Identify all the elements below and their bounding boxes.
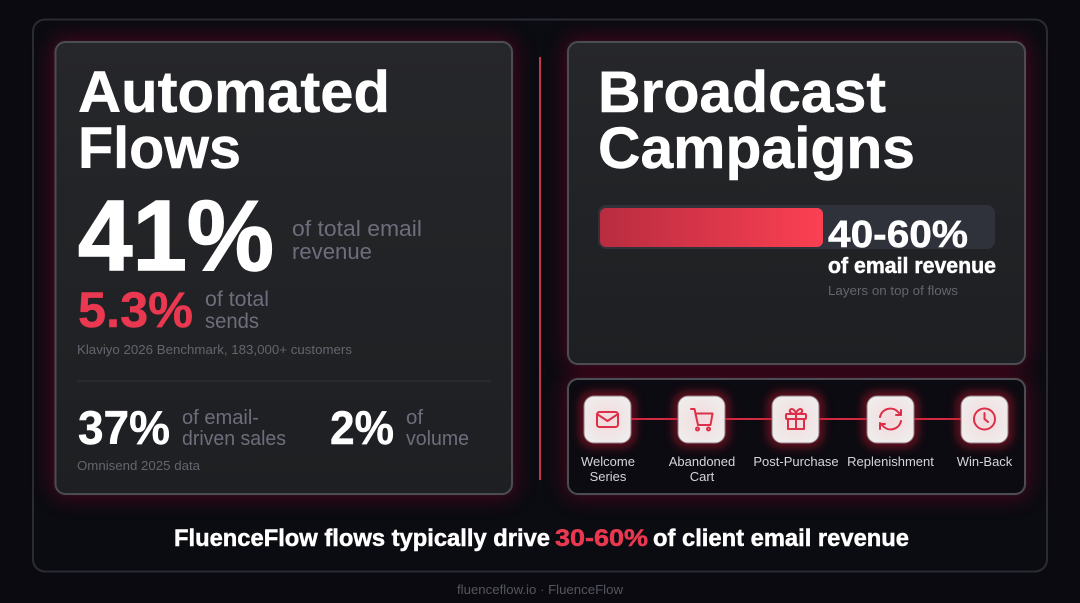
stat: 2 percent of volume: volume — [406, 428, 469, 450]
step: welcome series: Series — [590, 469, 627, 484]
icon: gift — [786, 409, 806, 429]
stat: 41 percent of revenue: revenue — [292, 239, 372, 264]
stat: 40-60 percent: 40-60% — [828, 214, 968, 256]
step: post-purchase — [753, 392, 839, 469]
icon: envelope — [597, 412, 618, 427]
heading: broadcast campaigns: Broadcast — [598, 60, 886, 125]
bottom summary: FluenceFlow flows typically drive — [174, 525, 550, 552]
bottom summary: 30-60% — [555, 525, 648, 552]
stat: 41 percent of revenue: 41% — [78, 180, 274, 292]
stat label: of email revenue — [828, 253, 996, 278]
stat: 2 percent of volume: of — [406, 407, 423, 429]
note: Layers on top of flows — [828, 283, 959, 298]
stat: 5.3 percent of sends: sends — [205, 310, 259, 333]
heading: broadcast campaigns: Campaigns — [598, 116, 915, 181]
stat: 41 percent of revenue: of total email — [292, 216, 422, 241]
panel: flow steps — [568, 379, 1025, 494]
stat: 2 percent of volume — [330, 401, 469, 454]
step: abandoned cart: Cart — [690, 469, 715, 484]
bottom summary: of client email revenue — [653, 525, 909, 552]
stat: 37 percent of sales: 37% — [78, 401, 170, 454]
stat: 5.3 percent of sends: 5.3% — [78, 282, 193, 338]
step: welcome series: Welcome — [581, 454, 635, 469]
stat: 5.3 percent of sends: of total — [205, 288, 269, 311]
step: replenishment: Replenishment — [847, 454, 934, 469]
stat: 37 percent of sales — [78, 401, 286, 454]
panel: automated flows — [56, 42, 512, 494]
stat: 41 percent of revenue — [78, 180, 422, 292]
source: omnisend: Omnisend 2025 data — [77, 458, 201, 473]
heading: automated flows: Flows — [78, 116, 241, 181]
stat: 5.3 percent of sends — [78, 282, 269, 338]
step: welcome series — [580, 392, 635, 484]
heading: broadcast campaigns — [598, 60, 915, 181]
panel: broadcast campaigns — [568, 42, 1025, 364]
icon: clock — [974, 408, 995, 430]
step: win-back — [957, 392, 1013, 469]
connector line — [607, 418, 985, 420]
stat: 37 percent of sales: driven sales — [182, 428, 286, 450]
stat: 2 percent of volume: 2% — [330, 401, 394, 454]
source: klaviyo: Klaviyo 2026 Benchmark, 183,000+ customers — [77, 342, 353, 357]
bottom summary — [174, 525, 909, 552]
stat: 37 percent of sales: of email- — [182, 407, 259, 429]
step: abandoned cart: Abandoned — [669, 454, 735, 469]
step: replenishment — [847, 392, 934, 469]
center divider — [539, 57, 541, 480]
icon: refresh — [880, 409, 901, 429]
step: abandoned cart — [669, 392, 735, 484]
heading: automated flows — [78, 60, 390, 181]
step: win-back: Win-Back — [957, 454, 1013, 469]
step: post-purchase: Post-Purchase — [753, 454, 839, 469]
heading: automated flows: Automated — [78, 60, 390, 125]
footer: fluenceflow.io · FluenceFlow — [457, 582, 624, 597]
icon: shopping cart — [691, 409, 712, 430]
progress bar — [598, 205, 995, 249]
